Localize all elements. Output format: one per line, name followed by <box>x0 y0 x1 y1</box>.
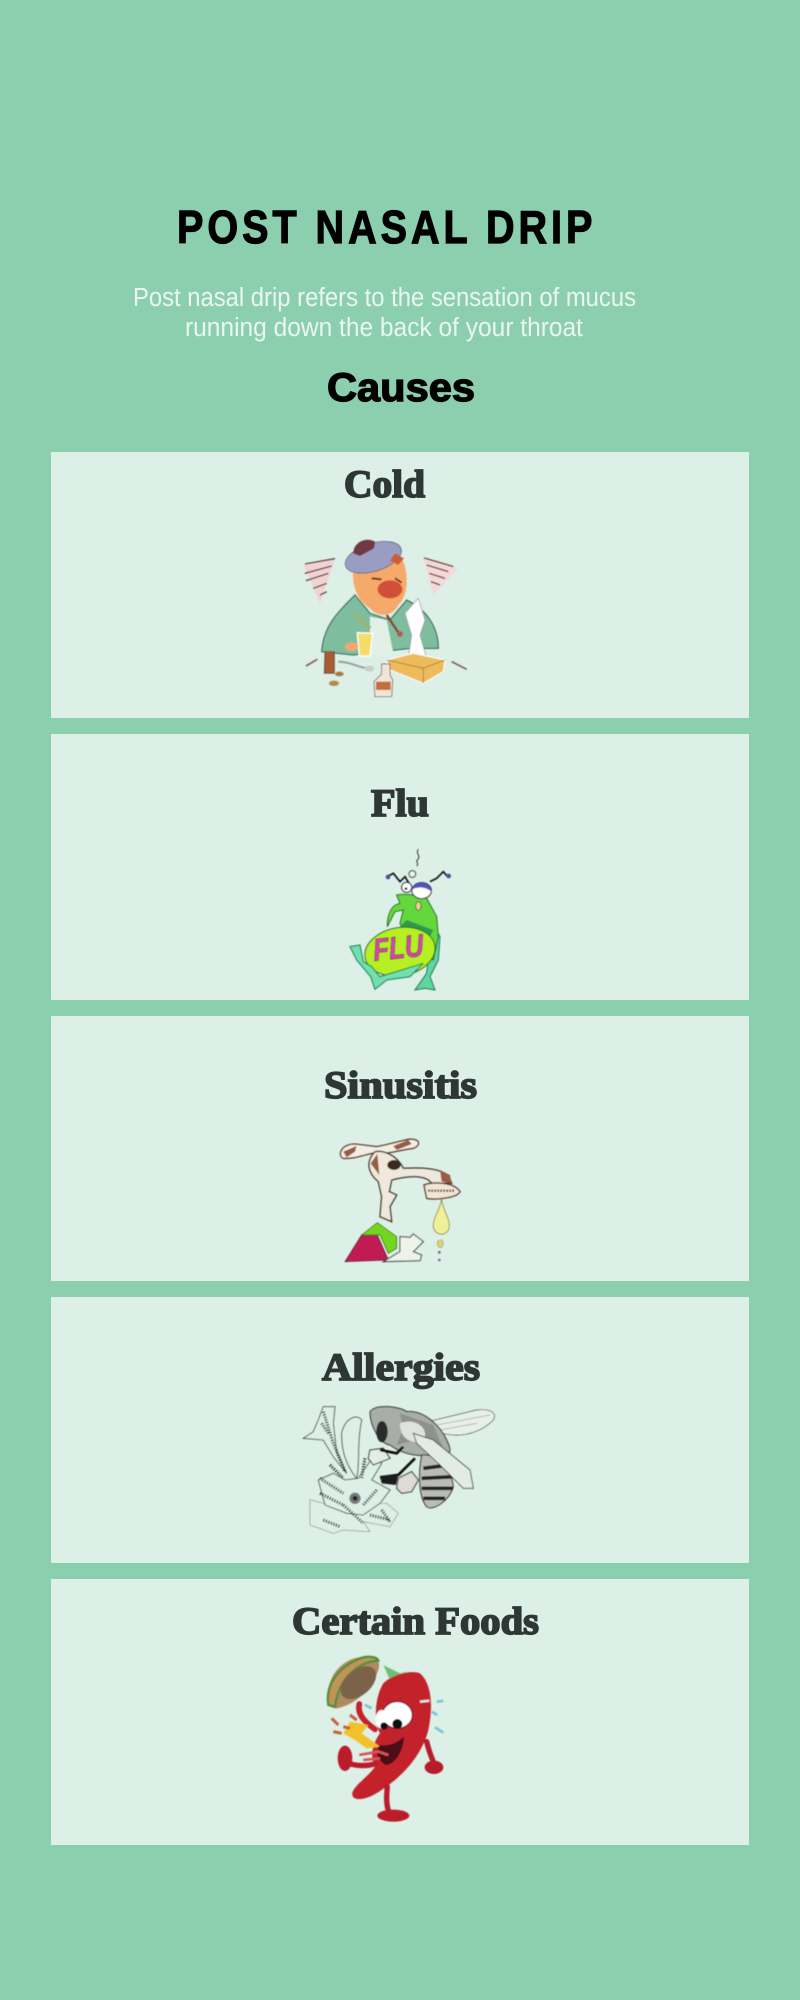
heading: cold: Cold <box>344 463 425 506</box>
heading: causes: Causes <box>327 366 475 410</box>
title: POST NASAL DRIP <box>177 202 592 254</box>
panel: certain foods <box>51 1579 749 1845</box>
icon: nose as dripping faucet <box>340 1139 460 1262</box>
panel: sinusitis <box>51 1016 749 1281</box>
icon: bee on flower sketch <box>303 1407 495 1533</box>
intro text: Post nasal drip refers to the sensation of mucus <box>133 284 636 312</box>
panel: allergies <box>51 1297 749 1563</box>
heading: certain foods: Certain Foods <box>292 1600 539 1643</box>
heading: sinusitis: Sinusitis <box>324 1064 477 1107</box>
icon: flu bug: FLU <box>371 928 426 968</box>
heading: allergies: Allergies <box>322 1346 480 1389</box>
panel: flu <box>51 734 749 1000</box>
intro text: running down the back of your throat <box>185 314 583 342</box>
icon: flu bug <box>350 849 451 990</box>
icon: sick man with hot water bottle <box>303 535 467 697</box>
heading: flu: Flu <box>371 782 429 825</box>
intro text <box>133 284 636 342</box>
panel: cold <box>51 452 749 718</box>
icon: chili pepper with sombrero <box>327 1656 443 1822</box>
